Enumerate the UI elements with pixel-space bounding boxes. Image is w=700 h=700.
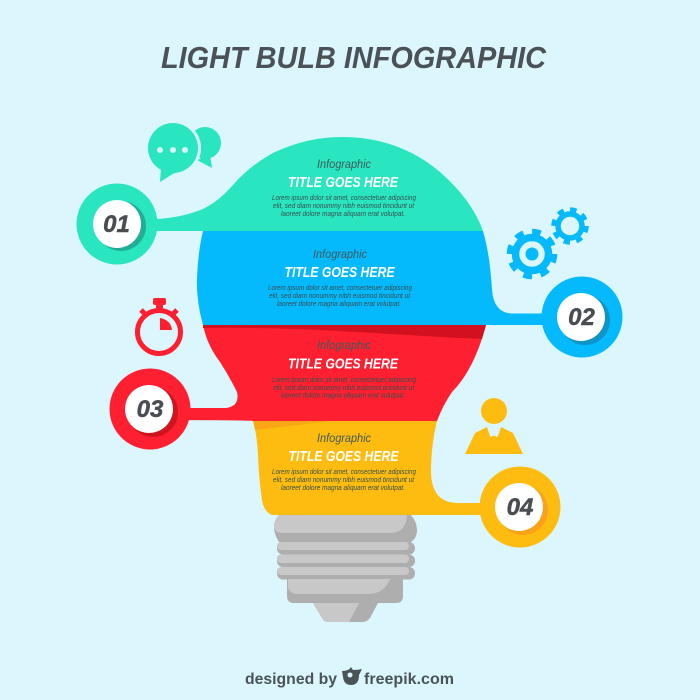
- text block 1: Infographic: [317, 159, 371, 171]
- footer credit: designed by: [245, 671, 337, 688]
- text block 3: Infographic: [317, 340, 371, 352]
- footer credit: [245, 667, 454, 688]
- number 01: 01: [103, 211, 130, 238]
- panel 3: red: [110, 325, 486, 450]
- text block 2: TITLE GOES HERE: [284, 265, 396, 281]
- text block 4: TITLE GOES HERE: [288, 449, 400, 465]
- text block 3: laoreet dolore magna aliquam erat volutpat.: [281, 392, 405, 400]
- title: LIGHT BULB INFOGRAPHIC: [161, 40, 547, 75]
- text block 3: elit, sed diam nonummy nibh euismod tincidunt ut: [273, 385, 415, 392]
- panel 1: teal: [76, 137, 483, 264]
- text block 3: TITLE GOES HERE: [288, 356, 399, 372]
- text block 2: laoreet dolore magna aliquam erat volutpat.: [277, 301, 401, 308]
- bulb base: [274, 515, 417, 622]
- number 02: 02: [568, 304, 595, 331]
- text block 2: Lorem ipsum dolor sit amet, consectetuer adipiscing: [268, 285, 412, 292]
- number 03: 03: [137, 396, 164, 423]
- icon: person: [465, 398, 523, 454]
- text block 1: [272, 159, 416, 218]
- icon: stopwatch: [138, 298, 180, 354]
- text block 4: laoreet dolore magna aliquam erat volutpat.: [281, 485, 405, 492]
- icon: gears: [510, 210, 586, 276]
- number 04: 04: [507, 494, 533, 521]
- text block 2: elit, sed diam nonummy nibh euismod tincidunt ut: [269, 293, 411, 300]
- footer credit: freepik.com: [364, 671, 454, 688]
- icon: freepik logo: [342, 667, 362, 685]
- text block 1: laoreet dolore magna aliquam erat volutpat.: [281, 211, 405, 218]
- text block 2: Infographic: [313, 249, 367, 261]
- text block 3: [272, 340, 416, 400]
- text block 4: elit, sed diam nonummy nibh euismod tincidunt ut: [273, 477, 415, 484]
- text block 1: elit, sed diam nonummy nibh euismod tincidunt ut: [273, 203, 415, 210]
- icon: speech bubbles: [145, 120, 221, 182]
- text block 4: Lorem ipsum dolor sit amet, consectetuer adipiscing: [272, 469, 416, 476]
- text block 1: Lorem ipsum dolor sit amet, consectetuer adipiscing: [272, 195, 416, 202]
- text block 4: [272, 433, 416, 492]
- text block 1: TITLE GOES HERE: [288, 175, 399, 191]
- panel 2: blue: [197, 231, 622, 358]
- panel 4: yellow: [253, 421, 560, 548]
- text block 4: Infographic: [317, 433, 371, 445]
- text block 2: [268, 249, 412, 308]
- text block 3: Lorem ipsum dolor sit amet, consectetuer adipiscing: [272, 377, 416, 384]
